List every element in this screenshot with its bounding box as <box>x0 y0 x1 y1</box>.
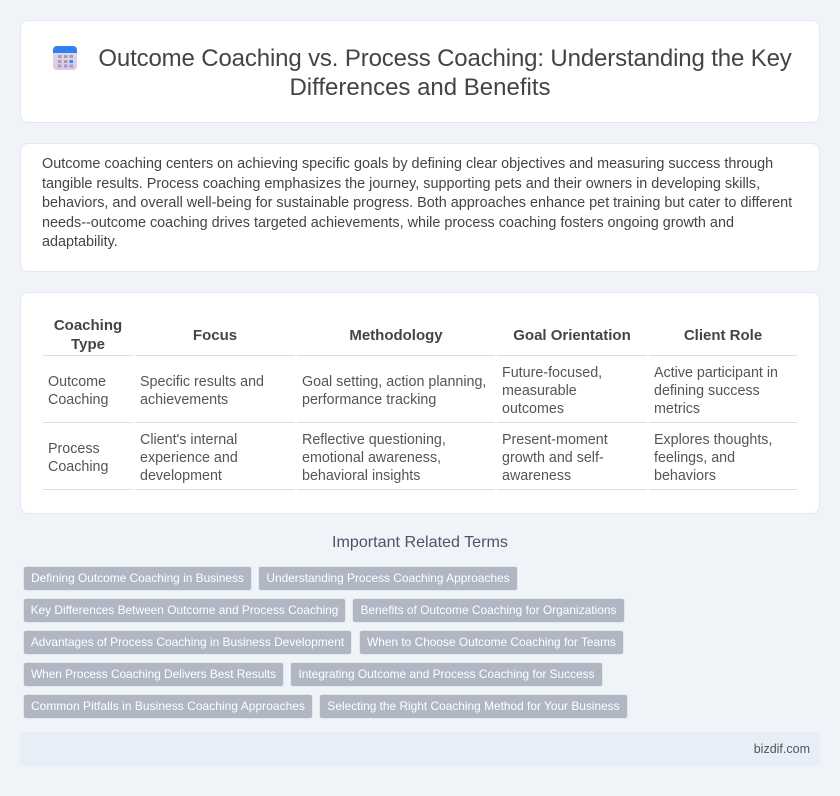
row: process coaching: behaviors <box>654 468 716 484</box>
row: process coaching: Reflective questioning, <box>302 432 446 448</box>
row: outcome coaching <box>48 365 778 417</box>
tag: Integrating Outcome and Process Coaching for Success <box>298 667 595 681</box>
row: outcome coaching: Active participant in <box>654 365 778 381</box>
row: outcome coaching: Coaching <box>48 392 108 408</box>
title: Differences and Benefits <box>289 74 551 101</box>
tag: When Process Coaching Delivers Best Results <box>31 667 276 681</box>
tag <box>23 630 352 655</box>
row: process coaching: feelings, and <box>654 450 735 466</box>
row: process coaching: growth and self- <box>502 450 604 466</box>
intro text: Outcome coaching centers on achieving specific goals by defining clear objectives and measuring success through <box>42 156 773 172</box>
row: process coaching: Explores thoughts, <box>654 432 772 448</box>
icon: calendar <box>53 46 77 70</box>
row: process coaching: awareness <box>502 468 571 484</box>
tag <box>23 566 252 591</box>
panel: intro <box>20 143 820 272</box>
intro text: adaptability. <box>42 234 118 250</box>
row: process coaching: experience and <box>140 450 238 466</box>
row: process coaching <box>48 432 772 484</box>
intro text <box>42 156 792 250</box>
row: process coaching: emotional awareness, <box>302 450 441 466</box>
tag: Selecting the Right Coaching Method for Your Business <box>327 699 620 713</box>
row: outcome coaching: measurable <box>502 383 577 399</box>
title <box>98 45 792 101</box>
tag <box>319 694 628 719</box>
row: outcome coaching: outcomes <box>502 401 564 417</box>
table header: Methodology <box>349 327 443 344</box>
row: process coaching: Present-moment <box>502 432 608 448</box>
row: outcome coaching: defining success <box>654 383 760 399</box>
table header: Focus <box>193 327 237 344</box>
related terms tags <box>23 566 628 719</box>
footer <box>20 732 820 766</box>
table header: Client Role <box>684 327 762 344</box>
tag <box>23 598 346 623</box>
intro text: behaviors, and overall well-being for sustainable progress. Both approaches enhance pet training but cater to different <box>42 195 792 211</box>
row: outcome coaching: performance tracking <box>302 392 436 408</box>
tag <box>23 694 313 719</box>
tag <box>359 630 624 655</box>
tag: When to Choose Outcome Coaching for Teams <box>367 635 616 649</box>
tag: Understanding Process Coaching Approaches <box>266 571 510 585</box>
title: Outcome Coaching vs. Process Coaching: Understanding the Key <box>98 45 792 72</box>
row: process coaching: Process <box>48 441 100 457</box>
row: process coaching: Coaching <box>48 459 108 475</box>
row: outcome coaching: Goal setting, action planning, <box>302 374 486 390</box>
tag: Key Differences Between Outcome and Process Coaching <box>31 603 338 617</box>
panel: comparison table <box>20 292 820 514</box>
table header: Type <box>71 336 105 353</box>
tag <box>23 662 284 687</box>
heading: related terms: Important Related Terms <box>332 533 508 551</box>
row: outcome coaching: achievements <box>140 392 228 408</box>
table header: Coaching <box>54 317 122 334</box>
tag: Benefits of Outcome Coaching for Organizations <box>360 603 617 617</box>
tag <box>352 598 625 623</box>
row: outcome coaching: Outcome <box>48 374 106 390</box>
row: outcome coaching: Future-focused, <box>502 365 602 381</box>
row: outcome coaching: Specific results and <box>140 374 264 390</box>
tag <box>258 566 518 591</box>
row: process coaching: development <box>140 468 222 484</box>
intro text: needs--outcome coaching drives targeted achievements, while process coaching fosters ongoing growth and <box>42 214 734 230</box>
row: process coaching: behavioral insights <box>302 468 420 484</box>
table header: Goal Orientation <box>513 327 631 344</box>
tag: Advantages of Process Coaching in Business Development <box>31 635 344 649</box>
row: outcome coaching: metrics <box>654 401 700 417</box>
tag <box>290 662 603 687</box>
intro text: tangible results. Process coaching emphasizes the journey, supporting pets and their owners in developing skills, <box>42 176 760 192</box>
table header <box>54 317 762 353</box>
tag: Common Pitfalls in Business Coaching Approaches <box>31 699 305 713</box>
row: process coaching: Client's internal <box>140 432 237 448</box>
footer credit: bizdif.com <box>754 742 810 756</box>
header panel <box>20 20 820 123</box>
comparison table <box>43 317 797 490</box>
tag: Defining Outcome Coaching in Business <box>31 571 244 585</box>
